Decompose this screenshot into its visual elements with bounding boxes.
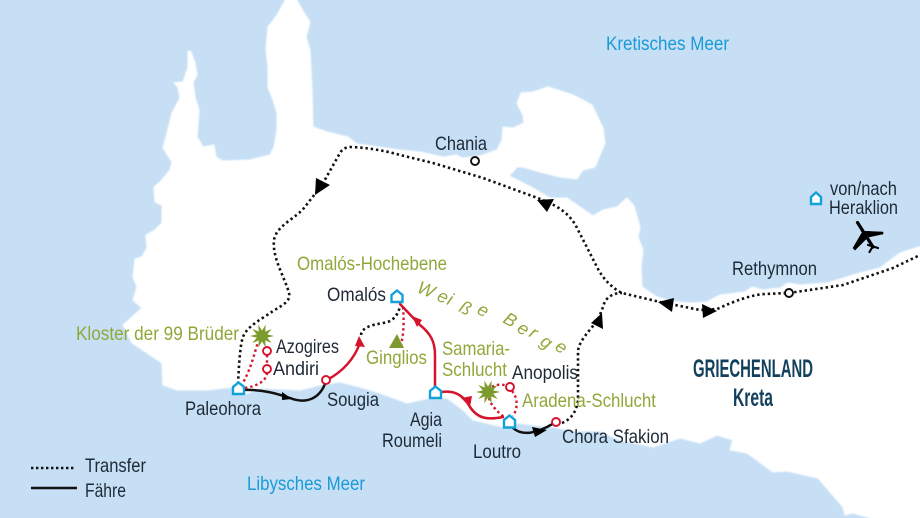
route: hike Sougia to Omalós	[327, 343, 360, 380]
icon: house Heraklion	[811, 192, 821, 204]
legend	[31, 455, 146, 502]
place label: von/nach Heraklion: Heraklion	[829, 197, 898, 219]
place label: Samaria-Schlucht: Samaria-	[442, 338, 510, 360]
icon: Aradena star	[476, 380, 500, 404]
place label: Paleohora: Paleohora	[185, 398, 261, 420]
place label: Andiri: Andiri	[273, 358, 319, 380]
region label: Weiße Berge: Weiße Berge	[415, 277, 571, 358]
excursion: Anopolis to Loutro	[512, 391, 517, 416]
legend: ferry line	[31, 487, 77, 489]
icon: house Omalós	[392, 290, 402, 302]
place label: Loutro: Loutro	[473, 441, 521, 463]
place label: Kloster der 99 Brüder: Kloster der 99 Brüder	[76, 323, 239, 345]
legend: transfer line	[31, 467, 76, 469]
stops: red circles	[263, 347, 560, 426]
route: transfer Sougia to Omalós	[361, 306, 400, 335]
route: transfer Chora Sfakion to main road	[562, 293, 622, 423]
stops: black circles	[471, 157, 793, 297]
dotted excursions	[241, 307, 517, 417]
route: ferry Agia Roumeli to Loutro	[442, 392, 503, 418]
legend: ferry label: Fähre	[85, 480, 126, 502]
place label: Sougia: Sougia	[327, 389, 379, 411]
route: ferry Paleohora to Sougia	[243, 381, 326, 401]
icon: mountain Ginglios	[389, 334, 404, 348]
excursion: Paleohora to Andiri	[245, 373, 267, 388]
excursion: Paleohora to Kloster	[241, 342, 258, 386]
place label: Aradena-Schlucht: Aradena-Schlucht	[522, 390, 656, 412]
place label: Omalós: Omalós	[327, 284, 386, 306]
icon: monastery star	[250, 324, 274, 348]
place label: Agia Roumeli: Roumeli	[382, 430, 442, 452]
place label: Ginglios: Ginglios	[366, 347, 427, 369]
place label: Rethymnon: Rethymnon	[732, 258, 817, 280]
arrows: red route	[355, 316, 472, 407]
route: hike Omalós to Agia Roumeli	[400, 304, 435, 387]
route: transfer Paleohora to Rethymnon via Chania	[238, 147, 920, 384]
place label: Chora Sfakion: Chora Sfakion	[562, 426, 669, 448]
place label: Agia Roumeli: Agia	[410, 409, 442, 431]
place label: Anopolis: Anopolis	[512, 362, 578, 384]
excursion: star to Loutro	[489, 398, 504, 417]
place label: Azogires: Azogires	[276, 336, 339, 358]
excursion: Azogires to Andiri	[266, 355, 268, 365]
region label: Kreta: Kreta	[733, 384, 774, 412]
icon: house Paleohora	[233, 382, 244, 394]
icon: house Agia Roumeli	[430, 386, 441, 398]
place label: Samaria-Schlucht: Schlucht	[442, 359, 508, 381]
legend: transfer label: Transfer	[85, 455, 146, 477]
icon: house Loutro	[504, 416, 515, 428]
place label: Chania: Chania	[435, 133, 487, 155]
country label: Griechenland: GRIECHENLAND	[693, 355, 813, 383]
sea label: Libysches Meer: Libysches Meer	[247, 473, 365, 495]
excursion: Omalós to Ginglios	[401, 307, 404, 345]
icon: airplane	[853, 222, 883, 252]
excursion: Aradena star to Anopolis	[492, 385, 507, 387]
route: ferry Loutro to Chora Sfakion	[513, 422, 556, 433]
arrows: transfer	[282, 178, 717, 437]
place label: von/nach Heraklion: von/nach	[830, 178, 897, 200]
sea label: Kretisches Meer: Kretisches Meer	[606, 33, 729, 55]
region label: Omalós-Hochebene: Omalós-Hochebene	[297, 253, 447, 275]
